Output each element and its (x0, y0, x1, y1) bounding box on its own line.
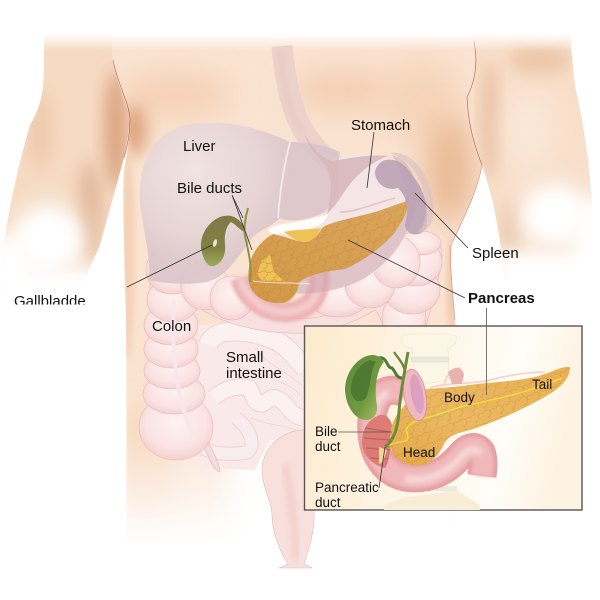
liver (140, 123, 340, 284)
label: Colon: Colon (152, 318, 191, 335)
label: Bile duct: duct (315, 439, 341, 454)
leader: pancreatic duct (379, 447, 385, 488)
spleen (375, 153, 434, 234)
label: Small intestine: intestine (226, 365, 282, 382)
inset duodenum (372, 390, 483, 480)
leader: gallbladder (127, 245, 212, 287)
white gap behind liver (268, 214, 328, 235)
label: Bile ducts: Bile ducts (177, 180, 242, 197)
descending colon (382, 231, 442, 342)
appendix (202, 438, 220, 472)
bile ducts main (245, 208, 251, 282)
label: Head: Head (403, 445, 435, 460)
rectum (262, 430, 318, 568)
exposed yellow pancreas tissue (284, 228, 321, 242)
leader: spleen (415, 193, 468, 248)
small intestine (195, 318, 305, 470)
label: Body: Body (444, 390, 475, 405)
inset pancreas (385, 367, 570, 466)
gallbladder (201, 216, 245, 266)
duodenum opening (403, 368, 428, 422)
label: Small intestine: Small (226, 349, 264, 366)
label: Pancreatic duct: Pancreatic (315, 480, 379, 495)
label: Bile duct: Bile (315, 424, 338, 439)
label: Spleen: Spleen (472, 245, 519, 262)
leader: pancreas to inset (486, 308, 488, 395)
stomach pale body (250, 154, 413, 293)
transverse colon (146, 236, 420, 320)
inset gallbladder (345, 355, 384, 420)
esophagus (280, 46, 340, 170)
armpit crease lines (113, 41, 482, 320)
leader: bile duct (338, 431, 392, 433)
label: Liver: Liver (183, 138, 216, 155)
duodenum pink loop (240, 270, 319, 312)
torso (112, 36, 482, 529)
left arm (4, 36, 130, 276)
pancreatic duct (385, 378, 562, 447)
duodenum cutaway interior (362, 415, 392, 468)
stomach translucent overlay (250, 134, 416, 293)
main pancreas (248, 201, 408, 303)
leader: stomach (367, 132, 374, 188)
blood vessels (430, 368, 545, 388)
label: Stomach: Stomach (351, 117, 410, 134)
panel: pancreas detail inset (304, 326, 582, 512)
transverse and descending colon base (150, 232, 442, 333)
spine vertebrae (384, 334, 480, 512)
right arm (468, 36, 592, 279)
pink ampulla detail (379, 447, 387, 464)
label: Tail: Tail (532, 377, 552, 392)
label: Pancreatic duct: duct (315, 495, 341, 510)
label: Gallbladder, clipped: Gallbladder (14, 293, 91, 310)
leader: pancreas (348, 240, 465, 298)
inset bile duct (378, 352, 408, 447)
ascending colon (139, 278, 213, 460)
leader: bile ducts (232, 195, 252, 250)
label: Pancreas: Pancreas (468, 290, 535, 307)
